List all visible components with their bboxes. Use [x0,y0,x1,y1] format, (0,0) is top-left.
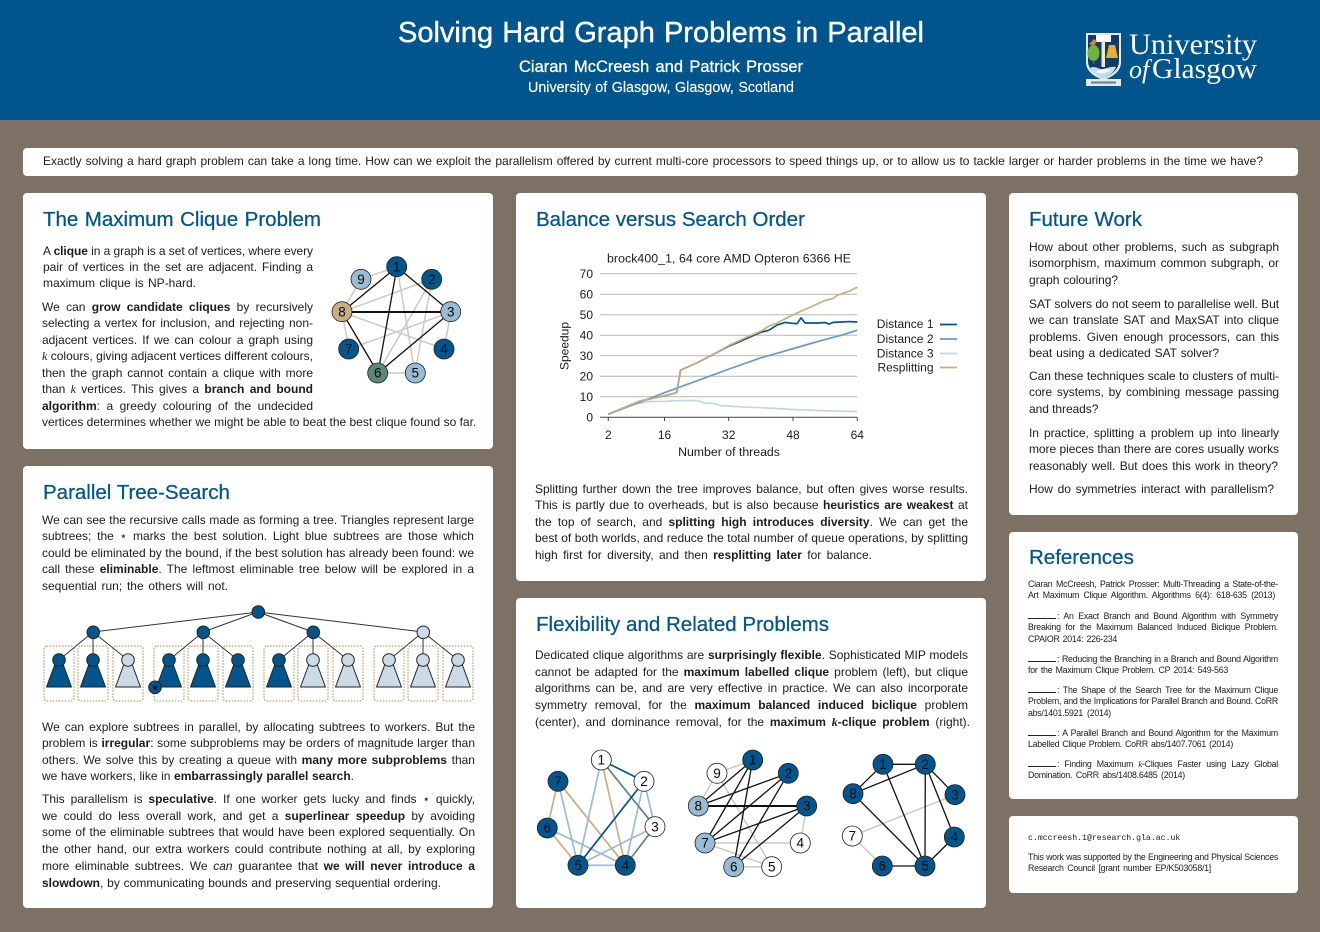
panel: future work [1009,193,1298,515]
line chart: speedup against threads: 20 [580,370,593,384]
heading: References [1029,546,1134,569]
text: flexibility discussion: symmetry removal, for the maximum balanced induced biclique problem [535,698,968,712]
line chart: speedup against threads [558,252,957,459]
header banner [0,0,1320,120]
text: symmetries: How do symmetries interact with parallelism? [1029,482,1274,496]
text: irregular subproblems: We can explore subtrees in parallel, by allocating subtrees to workers. But the [42,720,475,734]
chart: maximum balanced induced biclique graph: 8 [695,799,702,814]
chart: example graph with nine vertices: 4 [440,342,448,357]
text: balance discussion: the top of search, and splitting high introduces diversity. We can get the [535,515,968,529]
text: clusters: core systems, by combining message passing [1029,385,1279,399]
text: SAT solvers: we can translate SAT and MaxSAT into clique [1029,313,1279,327]
chart: maximum labelled clique graph: 7 [554,774,562,789]
poster title: Solving Hard Graph Problems in Parallel [398,17,924,49]
text: tree explanation: subtrees; the ⋆ marks the best solution. Light blue subtrees are those which [42,529,474,543]
icon: University of Glasgow logo: of [1129,55,1153,84]
text: speculative parallelism: some of the eliminable subtrees that would have been explored sequentially. On [42,825,475,839]
reference 2: CPAIOR 2014: 226-234 [1028,634,1117,644]
line chart: speedup against threads: 40 [580,328,593,342]
line chart: speedup against threads: 64 [851,428,864,442]
funding acknowledgement [1028,852,1278,873]
chart: maximum k-clique graph [842,754,966,876]
reference 3: for the Maximum Clique Problem. CP 2014: 549-563 [1028,665,1228,675]
chart: maximum k-clique graph: 3 [951,787,959,802]
panel: parallel tree-search [23,466,493,908]
line chart: speedup against threads: Distance 2 [877,332,934,346]
chart: example graph with nine vertices [332,256,462,384]
text: other problems: How about other problems, such as subgraph [1029,240,1279,254]
text: irregular subproblems: we have workers, like in embarrassingly parallel search. [42,769,354,783]
heading: The Maximum Clique Problem [43,208,321,231]
text: speculative parallelism: the other hand, our extra workers could contribute nothing at all, by exploring [42,842,475,856]
text: balance discussion: Splitting further down the tree improves balance, but often gives worse results. [535,482,968,496]
authors: Ciaran McCreesh and Patrick Prosser [519,58,803,76]
text: clique definition: A clique in a graph is a set of vertices, where every [43,244,313,258]
line chart: speedup against threads: 32 [722,428,736,442]
line chart: speedup against threads: Resplitting [877,360,934,374]
text: tree explanation: could be eliminated by the bound, if the best solution has already been found: we [42,546,474,560]
text: clique definition: pair of vertices in the set are adjacent. Finding a [43,260,313,274]
panel: introduction [23,148,1298,176]
chart: example graph with nine vertices: 3 [447,304,454,320]
chart: example graph with nine vertices: 6 [374,366,381,381]
heading: Parallel Tree-Search [43,481,230,504]
text: balance discussion: best of both worlds, and reduce the total number of queue operations, by splitting [535,531,968,545]
text: other problems: isomorphism, maximum common subgraph, or [1029,256,1279,270]
text: clusters: Can these techniques scale to clusters of multi- [1029,369,1279,383]
text: speculative parallelism: This parallelism is speculative. If one worker gets lucky and finds ⋆ quickly, [42,792,475,806]
text: branch and bound: than k vertices. This gives a branch and bound [42,382,313,396]
chart: search tree with subtrees: ★ [151,684,159,694]
panel: references [1009,532,1298,799]
chart: maximum balanced induced biclique graph: 9 [713,766,721,781]
chart: example graph with nine vertices: 8 [338,304,346,320]
text: branch and bound [42,300,476,429]
text: clique definition: maximum clique is NP-hard. [43,276,196,290]
text: flexibility discussion: Dedicated clique algorithms are surprisingly flexible. Sophisticated MIP models [535,648,968,662]
text: tree explanation [42,513,474,593]
reference 5: : A Parallel Branch and Bound Algorithm for the Maximum [1057,728,1278,738]
chart: maximum k-clique graph: 4 [951,830,959,845]
text: splitting in theory: In practice, splitting a problem up into linearly [1029,426,1279,440]
chart: example graph with nine vertices: 7 [345,342,352,357]
chart: maximum k-clique graph: 5 [921,859,929,874]
chart: maximum labelled clique graph: 3 [651,819,659,834]
icon: University of Glasgow logo: Glasgow [1152,54,1258,85]
funding acknowledgement: Research Council [grant number EP/K503058/1] [1028,863,1211,873]
reference 4: : The Shape of the Search Tree for the Maximum Clique [1057,684,1278,694]
chart: example graph with nine vertices: 9 [357,272,365,287]
text: clusters: and threads? [1029,402,1098,416]
text: speculative parallelism: we could do less overall work, and get a superlinear speedup by avoiding [42,809,475,823]
text: branch and bound: We can grow candidate cliques by recursively [42,300,313,314]
reference 3 [1028,654,1278,675]
line chart: speedup against threads: 2 [605,428,612,442]
text: irregular subproblems: others. We solve this by creating a queue with many more subproblems than [42,753,475,767]
reference 6: Domination. CoRR abs/1408.6485 (2014) [1028,770,1185,780]
text: tree explanation: sequential run; the others will not. [42,579,228,593]
line chart: speedup against threads: Speedup [558,322,572,370]
chart: maximum k-clique graph: 1 [879,757,887,772]
chart: maximum k-clique graph: 6 [879,859,886,874]
line chart: speedup against threads: 30 [580,349,593,363]
text: branch and bound: k colours, giving adjacent vertices different colours, [42,349,313,363]
reference 6 [1028,758,1278,780]
chart: maximum balanced induced biclique graph [688,750,818,878]
text: branch and bound: then the graph cannot contain a clique with more [42,366,313,380]
reference 5 [1028,728,1278,749]
chart: maximum labelled clique graph: 6 [544,821,551,836]
icon: University of Glasgow logo [1086,28,1258,86]
text: speculative parallelism: more eliminable subtrees. We can guarantee that we will never introduce a [42,859,475,873]
text: clique definition [43,244,314,290]
reference 4: abs/1401.5921 (2014) [1028,708,1111,718]
text: branch and bound: selecting a vertex for inclusion, and rejecting non- [42,316,313,330]
line chart: speedup against threads: 50 [580,308,593,322]
affiliation: University of Glasgow, Glasgow, Scotland [528,80,794,96]
reference 2: Breaking for the Maximum Balanced Induced Biclique Problem. [1028,622,1278,632]
chart: maximum labelled clique graph: 2 [640,774,648,789]
line chart: speedup against threads: 70 [580,267,593,281]
text: speculative parallelism: slowdown, by communicating bounds and preserving sequential ordering. [42,876,441,890]
chart: maximum balanced induced biclique graph: 5 [768,859,775,874]
panel: balance versus search order [516,193,986,581]
line chart: speedup against threads: 10 [580,390,593,404]
chart: maximum balanced induced biclique graph: 4 [797,836,805,851]
text: clusters [1029,369,1279,416]
text: branch and bound: adjacent vertices. If we can colour a graph using [42,333,313,347]
text: irregular subproblems [42,720,475,783]
chart: example graph with nine vertices: 2 [428,272,435,287]
heading: Balance versus Search Order [536,208,805,231]
text: SAT solvers: beat using a dedicated SAT solver? [1029,346,1219,360]
intro text: Exactly solving a hard graph problem can take a long time. How can we exploit the parallelism offered by current multi-core processors to speed things up, or to allow us to tackle larger or harder problems in the time we have? [43,154,1263,168]
text: tree explanation: call these eliminable. The leftmost eliminable tree below will be explored in a [42,562,474,576]
text: flexibility discussion [535,648,970,729]
chart: search tree with subtrees [43,605,474,702]
text: speculative parallelism [42,792,475,890]
reference 4: Problem, and the Implications for Parallel Branch and Bound. CoRR [1028,696,1278,706]
text: other problems [1029,240,1279,287]
text: balance discussion: high first for diversity, and then resplitting later for balance. [535,548,872,562]
chart: maximum labelled clique graph: 4 [622,858,630,873]
line chart: speedup against threads: 0 [586,410,593,424]
text: branch and bound: algorithm: a greedy colouring of the undecided [42,399,313,413]
panel: contact and funding [1009,816,1298,893]
line chart: speedup against threads: Distance 1 [877,317,934,331]
text: splitting in theory [1029,426,1279,473]
text: other problems: graph colouring? [1029,273,1118,287]
line chart: speedup against threads: 16 [658,428,671,442]
line chart: speedup against threads: Distance 3 [877,346,934,360]
text: irregular subproblems: problem is irregular: some subproblems may be orders of magnitude larger than [42,736,475,750]
reference 2 [1028,610,1278,644]
reference 4 [1028,684,1278,718]
text: SAT solvers [1029,297,1279,360]
chart: maximum k-clique graph: 2 [922,757,929,772]
reference 6: : Finding Maximum k-Cliques Faster using Lazy Global [1057,758,1278,768]
reference 1: Art Maximum Clique Algorithm. Algorithms 6(4): 618-635 (2013) [1028,590,1275,600]
panel: flexibility and related problems [516,598,986,908]
text: balance discussion: This is partly due to overheads, but is also because heuristics are weakest at [535,498,968,512]
icon: University of Glasgow logo: University [1129,28,1257,61]
text: flexibility discussion: algorithms can be, and are very effective in practice. We can also incorporate [535,681,968,695]
reference 2: : An Exact Branch and Bound Algorithm with Symmetry [1057,610,1278,620]
reference 1: Ciaran McCreesh, Patrick Prosser: Multi-Threading a State-of-the- [1028,578,1278,588]
heading: Flexibility and Related Problems [536,613,829,636]
panel: the maximum clique problem [23,193,493,449]
reference 3: : Reducing the Branching in a Branch and Bound Algorithm [1057,654,1278,664]
chart: maximum k-clique graph: 7 [849,829,856,844]
chart: example graph with nine vertices: 1 [393,260,400,274]
text: branch and bound: vertices determines whether we might be able to beat the best clique found so far. [42,415,476,429]
chart: maximum balanced induced biclique graph: 2 [785,766,792,781]
text: tree explanation: We can see the recursive calls made as forming a tree. Triangles represent large [42,513,474,527]
line chart: speedup against threads: 60 [580,288,593,302]
chart: maximum labelled clique graph [536,750,666,876]
text: flexibility discussion: (center), and dominance removal, for the maximum k-clique problem (right). [535,715,970,729]
chart: maximum k-clique graph: 8 [849,786,857,801]
line chart: speedup against threads: Number of threads [678,445,780,459]
text: SAT solvers: problems. Given enough processors, can this [1029,330,1279,344]
contact email: c.mccreesh.1@research.gla.ac.uk [1028,834,1180,843]
line chart: speedup against threads: 48 [786,428,800,442]
text: flexibility discussion: cannot be adapted for the maximum labelled clique problem (left), but clique [535,665,968,679]
text: splitting in theory: more pieces than there are cores usually works [1029,442,1279,456]
funding acknowledgement: This work was supported by the Engineering and Physical Sciences [1028,852,1278,862]
reference 5: Labelled Clique Problem. CoRR abs/1407.7061 (2014) [1028,739,1233,749]
chart: maximum balanced induced biclique graph: 3 [803,799,810,814]
chart: example graph with nine vertices: 5 [412,366,419,381]
chart: maximum balanced induced biclique graph: 1 [749,753,756,768]
text: splitting in theory: reasonably well. But does this work in theory? [1029,459,1278,473]
chart: maximum labelled clique graph: 5 [574,858,582,873]
text: balance discussion [535,482,968,562]
heading: Future Work [1029,208,1142,231]
chart: maximum balanced induced biclique graph: 6 [730,859,737,874]
chart: maximum balanced induced biclique graph: 7 [701,836,709,851]
reference 1 [1028,578,1278,600]
chart: maximum labelled clique graph: 1 [598,753,605,768]
line chart: speedup against threads: brock400_1, 64 core AMD Opteron 6366 HE [607,252,851,266]
text: SAT solvers: SAT solvers do not seem to parallelise well. But [1029,297,1279,311]
